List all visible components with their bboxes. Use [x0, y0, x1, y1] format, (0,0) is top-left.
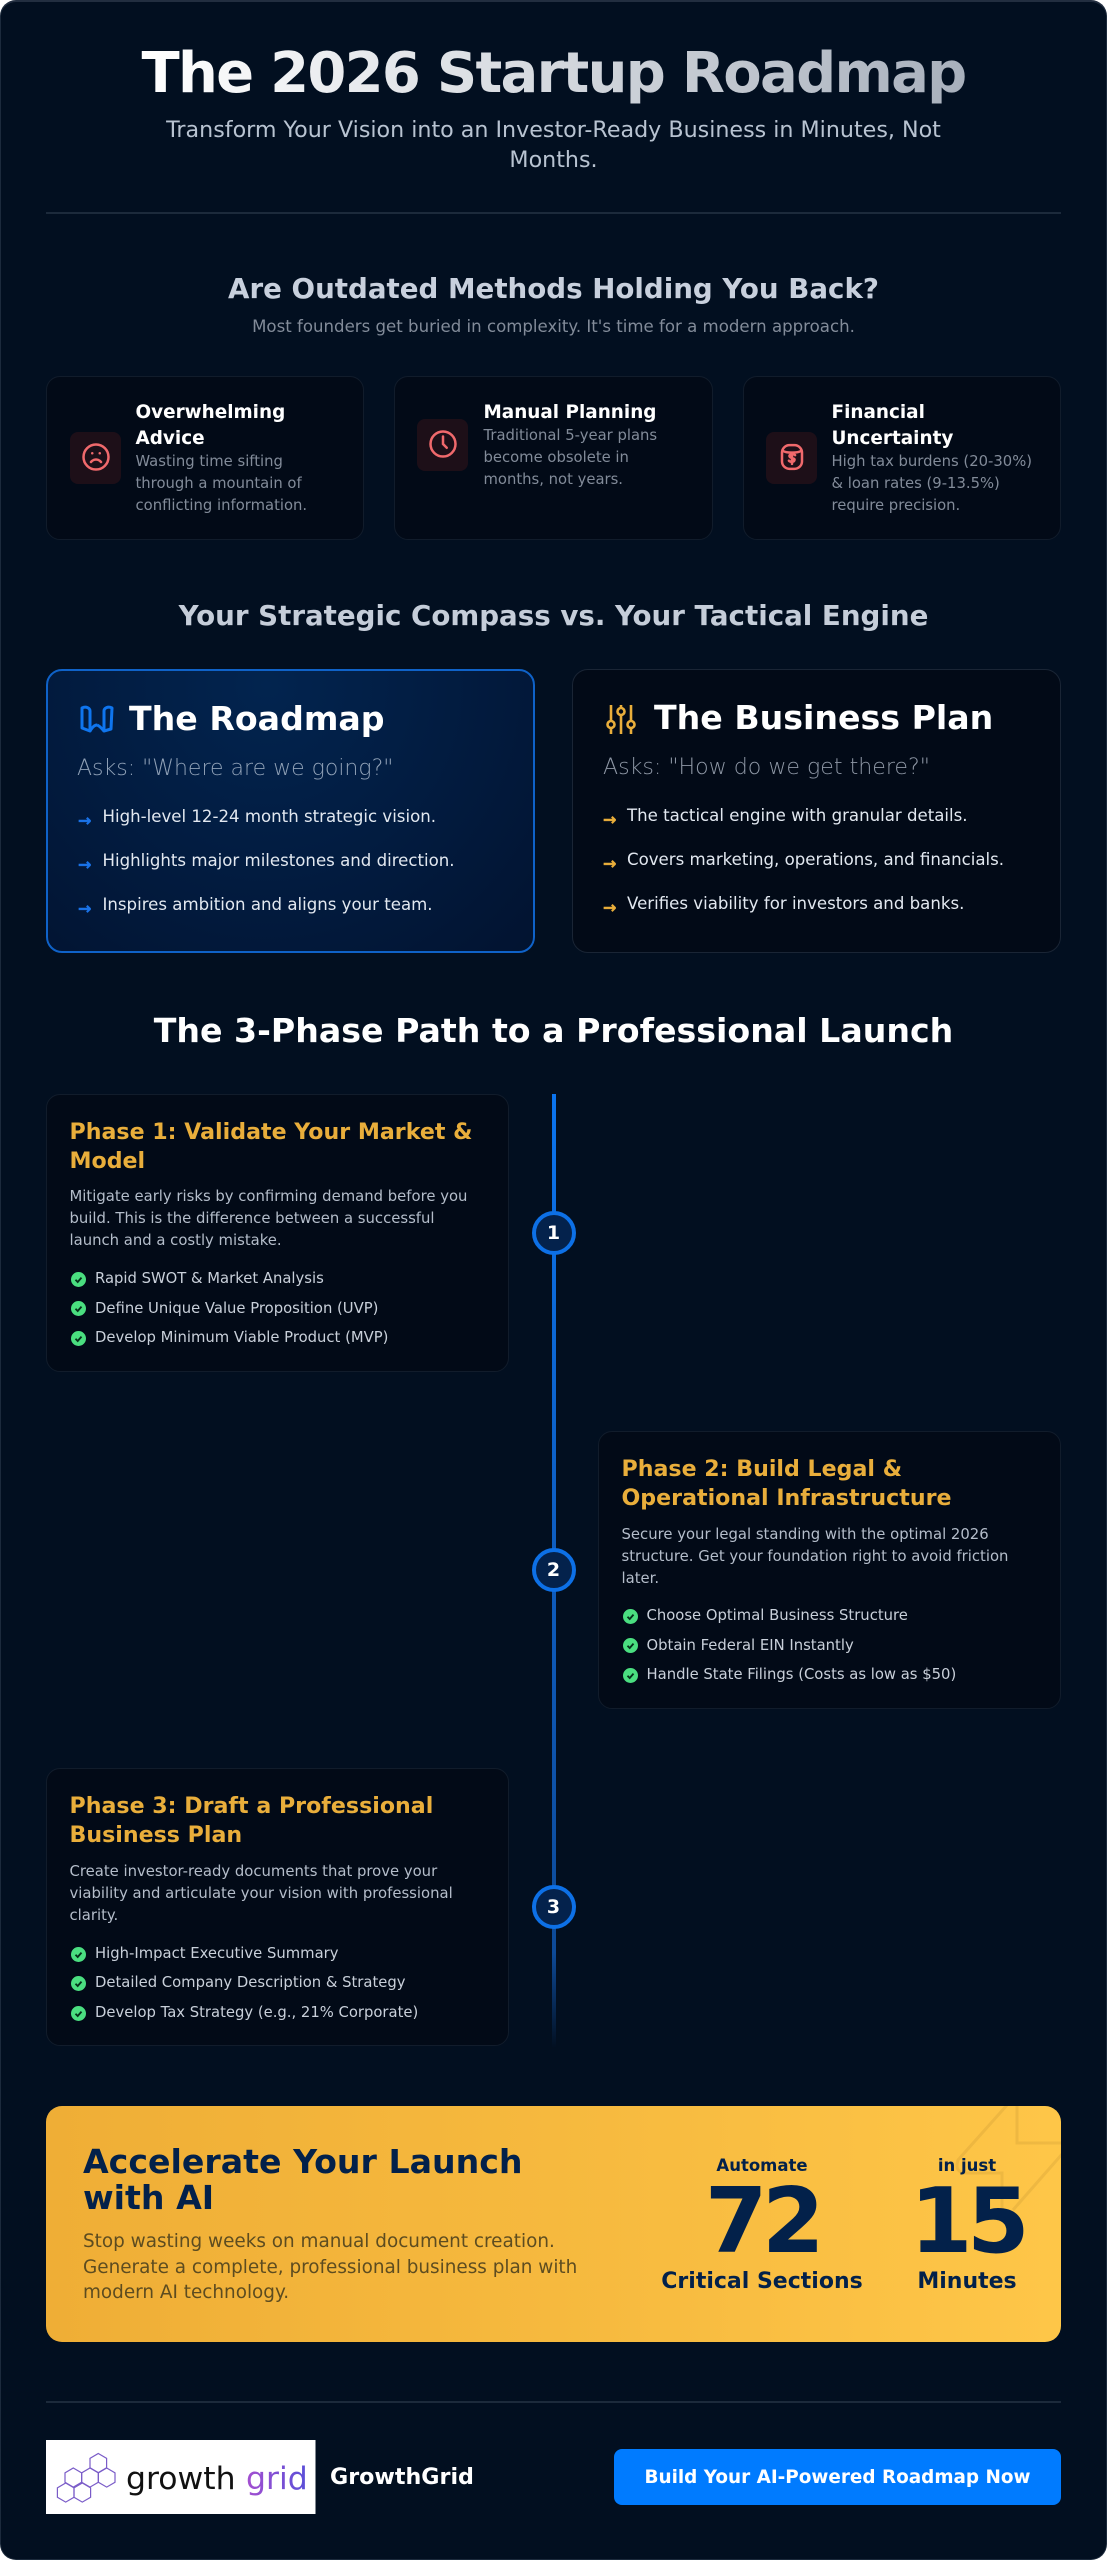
phase text: structure. Get your foundation right to avoid friction — [622, 1548, 1008, 1564]
phase text — [70, 1862, 453, 1924]
roadmap item 2: Highlights major milestones and direction. — [102, 851, 455, 870]
problem title: Financial — [832, 402, 925, 423]
phase title: Phase 2: Build Legal & — [622, 1456, 902, 1482]
checklist item 2: Detailed Company Description & Strategy — [95, 1974, 406, 1991]
problem text: conflicting information. — [136, 497, 307, 514]
checklist item 1: Choose Optimal Business Structure — [646, 1607, 908, 1624]
panel: manual planning — [394, 376, 712, 540]
icon: sliders — [606, 705, 636, 734]
phase text: viability and articulate your vision with professional — [70, 1884, 453, 1902]
plan item 3: → — [603, 898, 616, 916]
stat: 72 critical sections: 72 — [705, 2169, 819, 2274]
panel: financial uncertainty — [743, 376, 1061, 540]
panel: the business plan — [572, 669, 1061, 953]
icon: frown face — [70, 432, 121, 484]
phase title: Model — [70, 1148, 145, 1174]
problem text: through a mountain of — [136, 475, 302, 492]
checklist item 3: Develop Tax Strategy (e.g., 21% Corporate) — [95, 2004, 418, 2020]
problem text: High tax burdens (20-30%) — [832, 453, 1032, 470]
timeline node 3: 3 — [547, 1896, 560, 1918]
banner title — [83, 2142, 523, 2217]
problem text: become obsolete in — [484, 449, 629, 466]
checklist item 3: Handle State Filings (Costs as low as $50) — [646, 1666, 956, 1683]
checklist item 2: Obtain Federal EIN Instantly — [646, 1637, 854, 1654]
banner title: Accelerate Your Launch — [83, 2142, 523, 2180]
panel: phase 1 — [46, 1094, 509, 1372]
timeline node 2 — [532, 1548, 576, 1592]
header divider — [46, 212, 1061, 214]
timeline node 1 — [532, 1211, 576, 1255]
phase text — [70, 1188, 467, 1249]
subtitle: Transform Your Vision into an Investor-Ready Business in Minutes, Not — [166, 117, 941, 143]
roadmap item 1: → — [78, 810, 91, 830]
stat: 15 minutes: Minutes — [917, 2269, 1017, 2294]
subheading: outdated methods: Most founders get buried in complexity. It's time for a modern approach. — [252, 316, 855, 336]
phase text: launch and a costly mistake. — [70, 1232, 282, 1249]
phase text: build. This is the difference between a successful — [70, 1210, 435, 1227]
phase title: Business Plan — [70, 1822, 242, 1848]
problem text: months, not years. — [484, 471, 623, 488]
icon: lightning watermark — [956, 2106, 1061, 2211]
checklist item 1: Rapid SWOT & Market Analysis — [95, 1270, 324, 1287]
roadmap item 3: Inspires ambition and aligns your team. — [102, 895, 433, 914]
timeline node 3 — [532, 1885, 576, 1929]
icon: clock — [417, 419, 468, 471]
card question: Asks: "Where are we going?" — [77, 756, 393, 781]
card title: The Roadmap — [129, 699, 385, 738]
panel: overwhelming advice — [46, 376, 364, 540]
footer divider — [46, 2401, 1061, 2403]
roadmap item 3: → — [78, 898, 91, 918]
heading: outdated methods: Are Outdated Methods Holding You Back? — [228, 272, 879, 305]
phase text: clarity. — [70, 1906, 118, 1924]
logo: growth grid — [46, 2440, 316, 2514]
subtitle — [166, 117, 941, 173]
phase title: Operational Infrastructure — [622, 1485, 952, 1511]
phase title — [622, 1456, 952, 1511]
problem text: Traditional 5-year plans — [484, 427, 657, 444]
problem title: Overwhelming — [136, 402, 285, 423]
phase title: Phase 1: Validate Your Market & — [70, 1118, 472, 1144]
timeline line — [552, 1094, 556, 2048]
panel: the roadmap — [46, 669, 535, 953]
subtitle: Months. — [509, 147, 598, 173]
panel: phase 3 — [46, 1768, 509, 2046]
logo: growth grid: grid — [246, 2461, 308, 2497]
problem title: Advice — [136, 428, 205, 449]
problem title — [136, 402, 285, 449]
stat: 72 critical sections: Critical Sections — [661, 2269, 863, 2294]
plan item 1: → — [603, 810, 616, 828]
phase text: Mitigate early risks by confirming demand before you — [70, 1188, 467, 1205]
banner text: modern AI technology. — [83, 2282, 289, 2303]
heading: compass vs engine: Your Strategic Compass vs. Your Tactical Engine — [179, 598, 928, 632]
logo: growth grid: growth — [126, 2461, 236, 2497]
problem title — [832, 402, 953, 449]
title: The 2026 Startup Roadmap — [141, 41, 966, 106]
brand name: GrowthGrid — [330, 2464, 474, 2490]
heading: 3-phase path: The 3-Phase Path to a Professional Launch — [154, 1011, 953, 1050]
plan item 2: → — [603, 854, 616, 872]
timeline node 2: 2 — [547, 1559, 560, 1581]
problem text: Wasting time sifting — [136, 453, 283, 470]
icon: map — [80, 706, 114, 732]
banner text: Stop wasting weeks on manual document creation. — [83, 2231, 555, 2252]
stat: 15 minutes: in just — [938, 2156, 996, 2174]
problem title: Manual Planning — [484, 402, 656, 423]
button: call to action — [614, 2449, 1061, 2505]
checklist item 2: Define Unique Value Proposition (UVP) — [95, 1300, 378, 1317]
problem text — [136, 453, 307, 514]
checklist item 1: High-Impact Executive Summary — [95, 1944, 338, 1962]
phase title: Phase 3: Draft a Professional — [70, 1792, 433, 1818]
panel: AI call-out banner — [46, 2106, 1061, 2342]
plan item 2: Covers marketing, operations, and financials. — [627, 850, 1004, 869]
button: call to action: Build Your AI-Powered Roadmap Now — [644, 2467, 1031, 2488]
stat: 72 critical sections: Automate — [716, 2156, 808, 2174]
problem title: Uncertainty — [832, 428, 953, 449]
panel: phase 2 — [598, 1431, 1061, 1709]
plan item 3: Verifies viability for investors and banks. — [627, 894, 964, 913]
stat: 15 minutes: 15 — [910, 2169, 1024, 2274]
roadmap item 2: → — [78, 854, 91, 874]
phase text: later. — [622, 1570, 659, 1586]
card question: Asks: "How do we get there?" — [603, 754, 930, 780]
phase text: Create investor-ready documents that prove your — [70, 1862, 437, 1880]
problem text: require precision. — [832, 497, 960, 514]
problem text — [483, 427, 657, 488]
phase title — [70, 1792, 433, 1848]
phase title — [70, 1118, 472, 1174]
roadmap item 1: High-level 12-24 month strategic vision. — [102, 807, 436, 826]
checklist item 3: Develop Minimum Viable Product (MVP) — [95, 1329, 388, 1346]
card title: The Business Plan — [654, 698, 993, 737]
stat: 72 critical sections — [661, 2156, 863, 2294]
plan item 1: The tactical engine with granular details. — [627, 806, 968, 825]
phase text — [622, 1526, 1008, 1586]
icon: money — [766, 432, 816, 484]
problem text: & loan rates (9-13.5%) — [832, 475, 1000, 492]
timeline node 1: 1 — [547, 1222, 560, 1244]
phase text: Secure your legal standing with the optimal 2026 — [622, 1526, 989, 1542]
banner title: with AI — [83, 2178, 214, 2217]
problem text — [832, 453, 1032, 514]
banner text: Generate a complete, professional business plan with — [83, 2257, 577, 2278]
banner text — [83, 2231, 577, 2303]
